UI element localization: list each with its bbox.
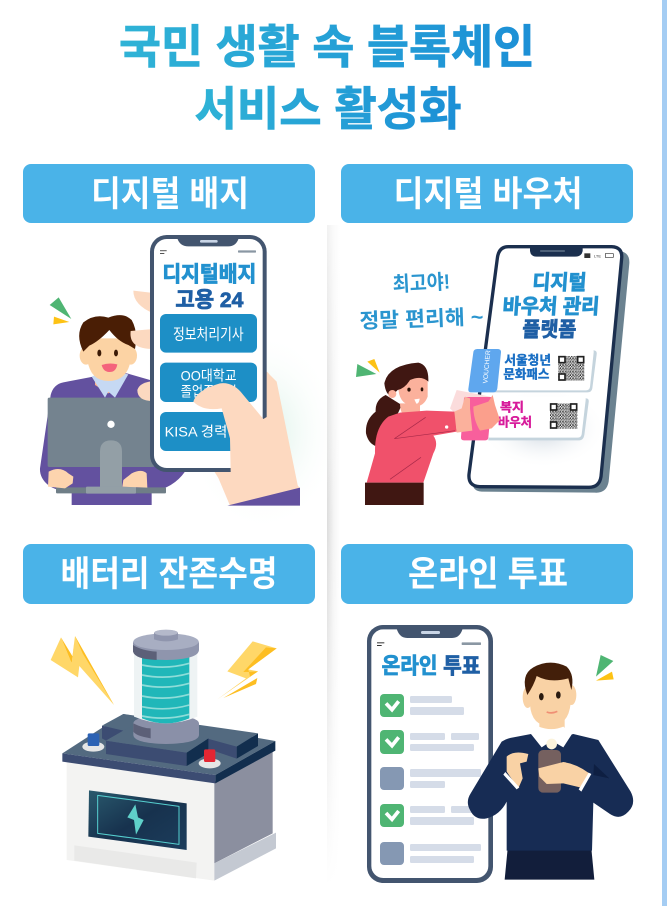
badge button 2: [160, 363, 257, 402]
person with laptop: [40, 315, 185, 505]
speech text: 정말 편리해 ~: [359, 306, 484, 333]
badge button 3: KISA 경력증명: [165, 423, 254, 439]
badge button 2: OO대학교: [181, 367, 237, 383]
ballot row 4: [380, 804, 481, 827]
battery body: [62, 714, 276, 881]
title: 국민 생활 속 블록체인: [119, 21, 535, 73]
voucher card 2: 바우처: [498, 415, 532, 429]
phone: [367, 625, 493, 883]
phone heading: 바우처 관리: [502, 295, 600, 318]
phone heading: 디지털배지: [162, 263, 256, 287]
voucher card 2: 복지: [500, 400, 524, 414]
man with phone: [468, 663, 633, 880]
fingers behind phone: [130, 291, 298, 502]
icon: accent triangles: [596, 655, 614, 681]
centre divider shade: [327, 225, 340, 886]
panel: battery illustration: [51, 630, 277, 881]
title: [119, 21, 535, 135]
title: 서비스 활성화: [194, 83, 462, 135]
heading: 디지털 배지: [23, 164, 315, 223]
heading: 디지털 바우처: [341, 164, 633, 223]
badge button 1: [160, 314, 257, 353]
panel: digital voucher illustration: [356, 247, 629, 505]
icon: accent triangles: [50, 297, 71, 324]
sleeve: [227, 488, 300, 506]
icon: accent triangles: [356, 359, 380, 377]
ballot row 3: [380, 767, 481, 790]
badge button 3: [160, 412, 257, 451]
ballot row 1: [380, 694, 464, 717]
icon: lightning right: [217, 641, 277, 699]
heading: 배터리 잔존수명: 배터리 잔존수명: [60, 555, 278, 594]
speech text: 최고야!: [392, 271, 451, 296]
right edge strip: [662, 0, 667, 906]
badge button 2: 졸업증명서: [181, 383, 237, 399]
cell tower: [133, 630, 199, 744]
panel: digital badge illustration: [40, 235, 340, 532]
terminal: blue: [82, 733, 104, 752]
voucher card 1: [490, 349, 597, 392]
phone heading: [500, 271, 602, 342]
blue voucher ticket: [468, 349, 501, 392]
heading: 온라인 투표: 온라인 투표: [408, 555, 568, 594]
phone heading: 플랫폼: [522, 319, 577, 342]
phone heading: 디지털: [531, 271, 587, 294]
woman with thumbs up: [365, 363, 500, 505]
pink voucher ticket: [450, 390, 492, 440]
speech text: [359, 271, 484, 333]
heading: 디지털 배지: 디지털 배지: [91, 175, 249, 214]
battery window: [88, 790, 187, 850]
phone: LTE: [594, 254, 601, 259]
soft glow: [187, 332, 340, 532]
phone subheading: 고용 24: [175, 288, 243, 312]
blue voucher ticket: VOUCHER: [482, 350, 492, 384]
voucher card 1: 문화패스: [503, 367, 550, 381]
terminal: red: [199, 749, 221, 768]
heading: 디지털 바우처: 디지털 바우처: [394, 175, 582, 214]
badge button 1: 정보처리기사: [173, 326, 244, 343]
voucher card 1: 서울청년: [504, 353, 551, 367]
ballot row 5: [380, 842, 481, 865]
phone: [150, 235, 267, 472]
voucher card 2: [488, 397, 589, 440]
ballot row 2: [380, 730, 479, 754]
phone heading: 온라인 투표: [382, 653, 480, 678]
heading: 온라인 투표: [341, 544, 633, 604]
phone shadow: [480, 388, 607, 468]
icon: lightning left: [51, 636, 114, 705]
heading: 배터리 잔존수명: [23, 544, 315, 604]
hand holding phone: [193, 372, 300, 506]
panel: online voting illustration: [367, 625, 633, 883]
phone: [469, 247, 629, 493]
